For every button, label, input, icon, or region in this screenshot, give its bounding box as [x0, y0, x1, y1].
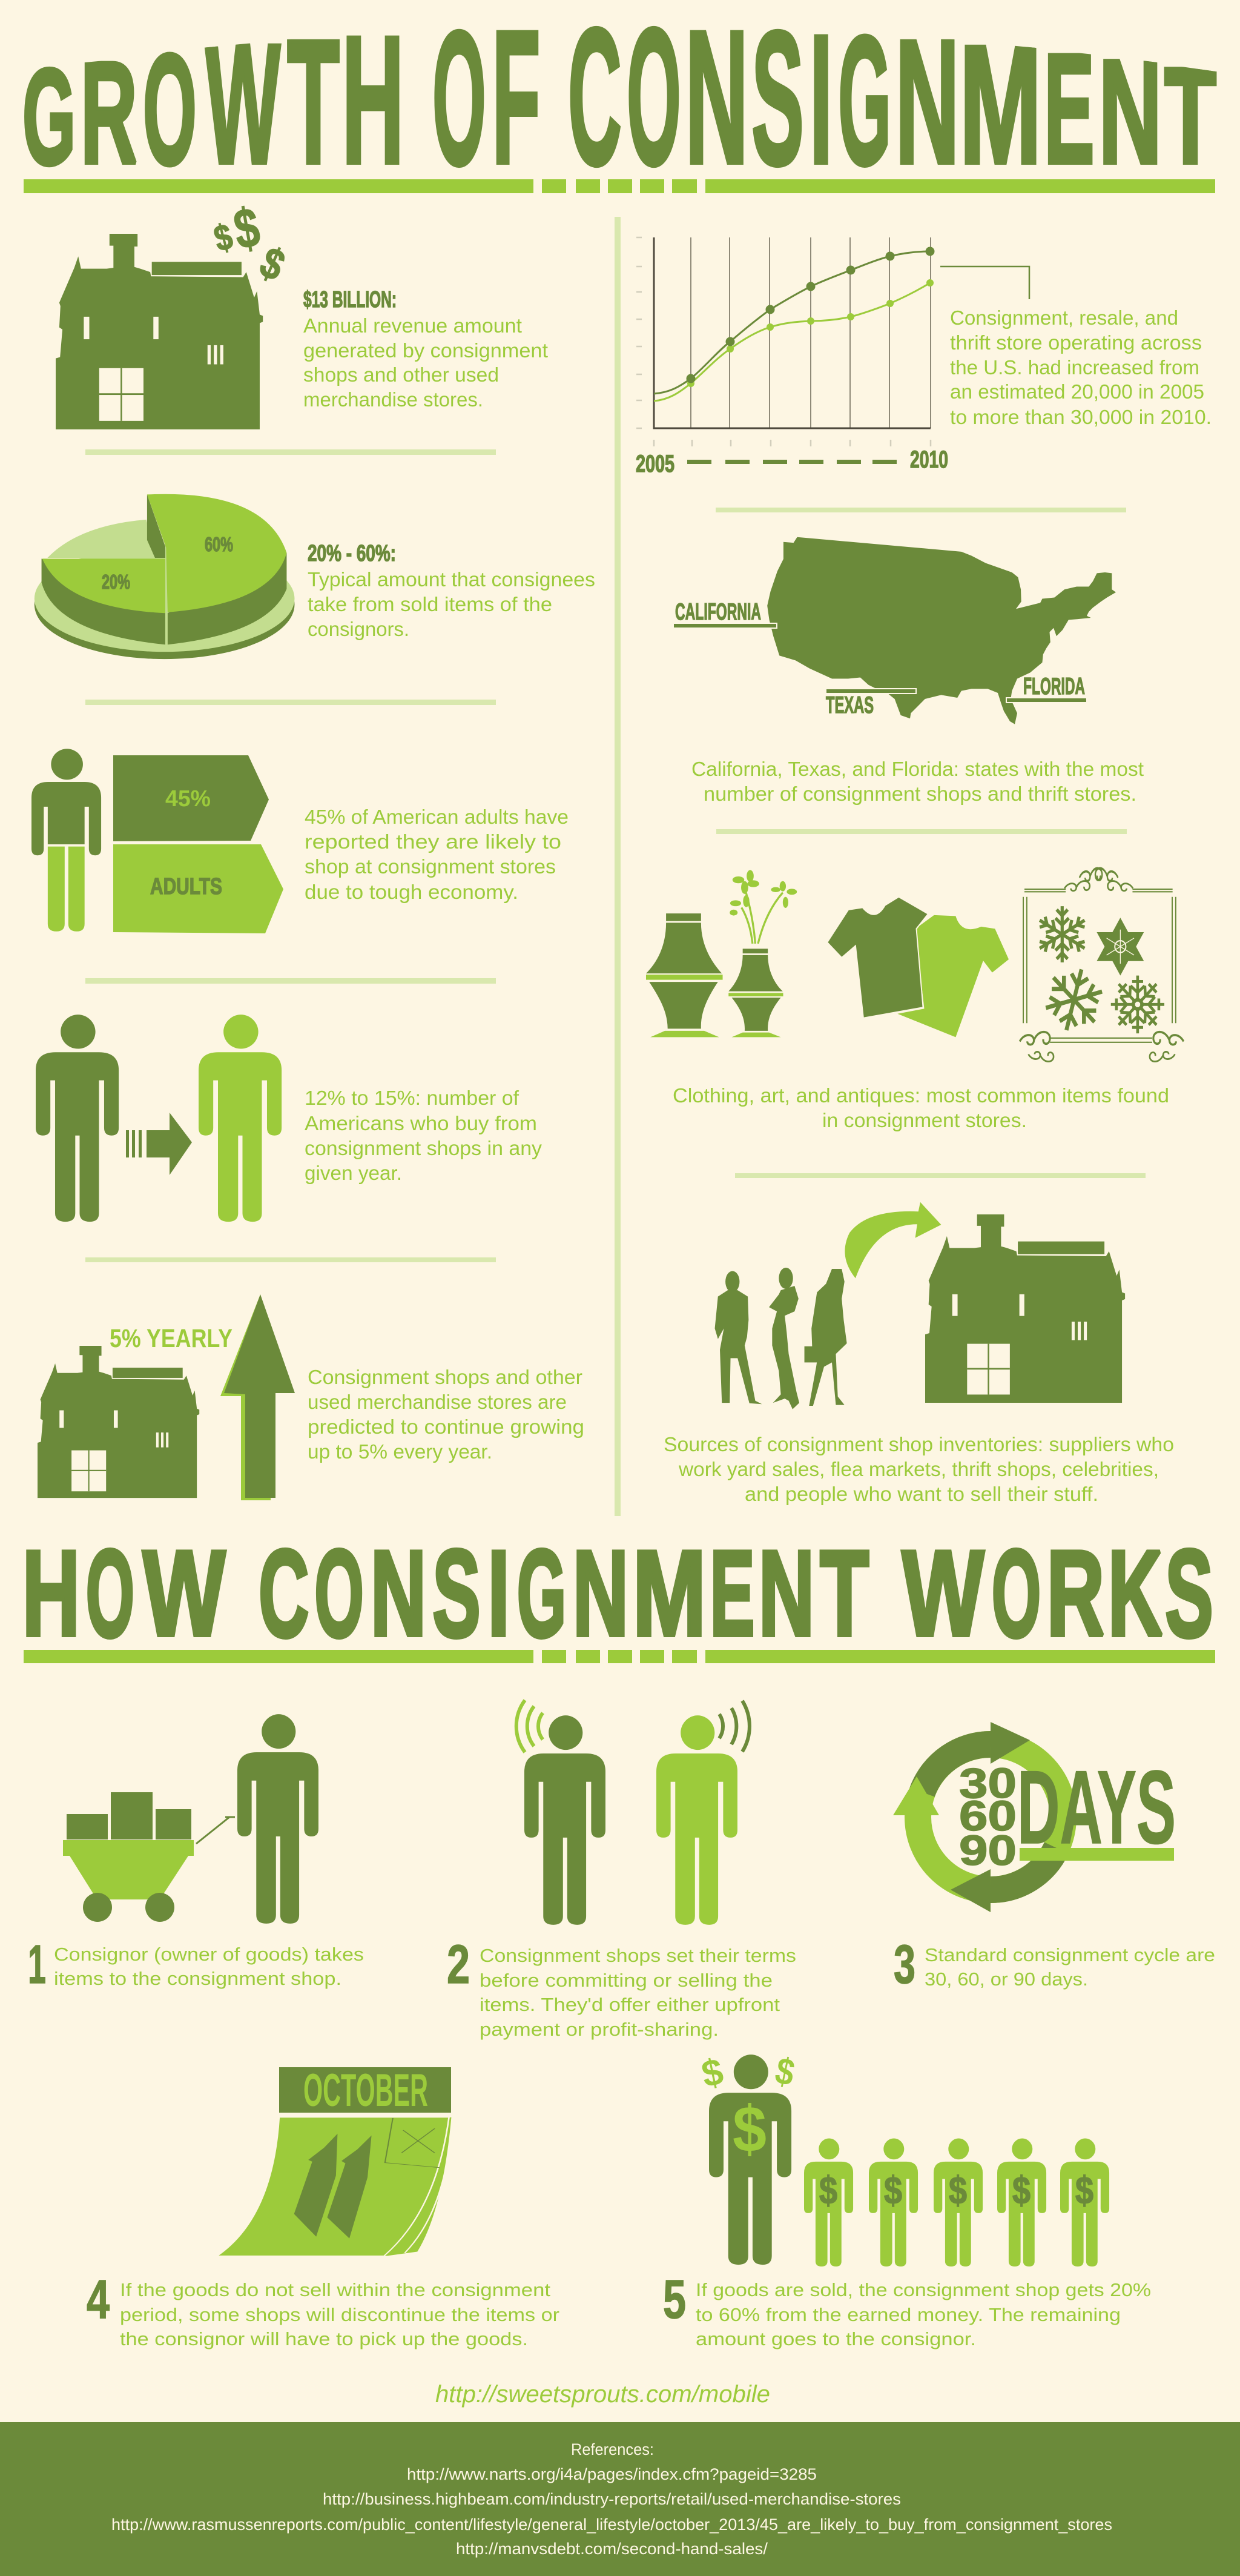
title: growth of consignment: G: [838, 0, 891, 203]
text: step 3: [925, 1944, 1215, 1990]
number 4: 4: [87, 2270, 110, 2330]
label: florida: FLORIDA: [1023, 674, 1085, 700]
text: step 4: period, some shops will discontinue the items or: [120, 2304, 559, 2325]
icon: shop with dollar signs: [56, 196, 292, 429]
line chart: [636, 237, 935, 446]
title: how consignment works: R: [1047, 1526, 1104, 1661]
text: step 5: to 60% from the earned money. The remaining: [696, 2304, 1121, 2325]
text: growth prediction: up to 5% every year.: [308, 1440, 492, 1463]
title: how consignment works: N: [371, 1526, 426, 1661]
icon: small vase with flowers: [728, 870, 797, 1037]
title: growth of consignment: I: [810, 0, 833, 202]
number 2: 2: [447, 1935, 470, 1995]
number 5: 5: [663, 2270, 686, 2330]
panel: store count chart: [636, 237, 1212, 477]
panel: 12 to 15 percent: [36, 1015, 542, 1222]
title: growth of consignment: [24, 25, 1217, 168]
title: growth of consignment: R: [81, 32, 137, 194]
text: store count: the U.S. had increased from: [950, 356, 1199, 379]
icon: dark person: [36, 1015, 119, 1222]
text: inventory sources: work yard sales, flea markets, thrift shops, celebrities,: [678, 1458, 1159, 1480]
panel: 20 to 60 percent: [35, 494, 595, 659]
icon: half filled person: [31, 749, 101, 932]
icon: shop owner with dollar signs: [698, 2050, 798, 2265]
text: store count: thrift store operating across: [950, 331, 1202, 354]
title: growth of consignment: O: [143, 22, 197, 197]
text: americans buying: 12% to 15%: number of: [305, 1087, 519, 1109]
panel: step 2: [447, 1700, 796, 2040]
text: step 1: items to the consignment shop.: [54, 1968, 341, 1989]
title: how consignment works: W: [143, 1526, 226, 1661]
text: 45 percent adults: shop at consignment stores: [305, 855, 556, 878]
connector line: [940, 267, 1029, 299]
text: annual revenue: Annual revenue amount: [303, 314, 522, 337]
icon: two people talking: [516, 1700, 750, 1925]
axis labels 2005 to 2010: 2010: [910, 446, 948, 473]
icon: calendar: [217, 2065, 451, 2256]
text: step 4: the consignor will have to pick up the goods.: [120, 2328, 528, 2349]
icon: five consignors with dollar signs: [804, 2138, 1109, 2266]
title: growth of consignment: G: [22, 41, 76, 193]
title: how consignment works: W: [902, 1526, 984, 1661]
title: how consignment works: C: [259, 1524, 309, 1663]
footer: references: http://manvsdebt.com/second-hand-sales/: [456, 2540, 768, 2558]
text: 45 percent adults: 45% of American adults have: [305, 806, 569, 828]
icon: five consignors with dollar signs: $: [819, 2168, 837, 2212]
title: how consignment works: G: [517, 1524, 566, 1663]
text: americans buying: given year.: [305, 1162, 402, 1184]
text: annual revenue: shops and other used: [303, 363, 499, 386]
icon: shop with dollar signs: $: [229, 196, 264, 261]
icon: framed snowflake art: [1020, 868, 1184, 1062]
title: how consignment works: O: [314, 1524, 364, 1663]
title: how consignment works: N: [573, 1526, 628, 1661]
text: inventory sources: Sources of consignment shop inventories: suppliers who: [664, 1433, 1174, 1455]
text: consignee share: Typical amount that consignees: [308, 568, 595, 591]
icon: up arrow: [220, 1294, 295, 1500]
text: top states: number of consignment shops and thrift stores.: [704, 783, 1136, 805]
text: common items: Clothing, art, and antiques: most common items found: [673, 1084, 1169, 1107]
panel: step 1: [28, 1714, 364, 1995]
label: texas: TEXAS: [826, 692, 874, 718]
heading: 20 to 60 percent: 20% - 60%:: [308, 541, 396, 566]
label: 5 percent yearly: 5% YEARLY: [110, 1324, 232, 1353]
panel: inventory sources: [664, 1202, 1174, 1505]
text: growth prediction: [308, 1366, 584, 1463]
icon: cycle arrows with 30 60 90 days: 30: [959, 1760, 1017, 1807]
text: store count: an estimated 20,000 in 2005: [950, 380, 1204, 403]
text: step 4: [120, 2279, 559, 2349]
icon: consignor person: [237, 1714, 318, 1924]
text: step 1: [54, 1944, 364, 1989]
footer: references: http://www.rasmussenreports.com/public_content/lifestyle/general_lifestyle/october_2013/45_are_likely_to_buy_from_consignment_stores: [111, 2515, 1112, 2534]
panel: 13 billion revenue: [56, 196, 548, 429]
text: top states: California, Texas, and Florida: states with the most: [691, 758, 1144, 780]
text: step 5: If goods are sold, the consignment shop gets 20%: [696, 2279, 1151, 2300]
panel: common items: [646, 868, 1184, 1131]
icon: shop: [925, 1214, 1125, 1403]
text: step 1: Consignor (owner of goods) takes: [54, 1944, 364, 1965]
pie chart: 60%: [205, 533, 233, 555]
number 1: 1: [28, 1935, 46, 1995]
title: how consignment works: T: [820, 1526, 869, 1661]
title: growth of consignment: T: [287, 3, 340, 200]
text: common items: in consignment stores.: [822, 1109, 1027, 1131]
text: step 5: [696, 2279, 1151, 2349]
title: how consignment works: [22, 1524, 1213, 1663]
icon: shop owner with dollar signs: $: [771, 2050, 798, 2094]
icon: cycle arrows with 30 60 90 days: 90: [959, 1827, 1017, 1874]
heading: 13 billion: $13 BILLION:: [303, 287, 397, 313]
title: growth of consignment: M: [960, 10, 1041, 199]
text: store count: Consignment, resale, and: [950, 306, 1178, 329]
pie chart: [35, 494, 294, 659]
panel: step 4: [87, 2065, 559, 2349]
text: step 2: payment or profit-sharing.: [480, 2019, 719, 2040]
text: annual revenue: generated by consignment: [303, 339, 548, 362]
footer: references: http://www.narts.org/i4a/pages/index.cfm?pageid=3285: [407, 2465, 817, 2483]
text: step 2: items. They'd offer either upfront: [480, 1994, 780, 2015]
section rule: [24, 1650, 1215, 1663]
label: california: [673, 599, 777, 628]
title: how consignment works: E: [710, 1526, 754, 1661]
text: consignee share: [308, 568, 595, 640]
panel: us states: [673, 537, 1144, 805]
icon: shop owner with dollar signs: $: [698, 2051, 727, 2096]
icon: calendar: OCTOBER: [303, 2065, 428, 2116]
text: store count: [950, 306, 1212, 428]
label: florida: [1006, 674, 1087, 703]
text: store count: to more than 30,000 in 2010.: [950, 406, 1212, 428]
text: step 3: 30, 60, or 90 days.: [925, 1968, 1088, 1990]
title: how consignment works: I: [487, 1526, 510, 1661]
text: inventory sources: and people who want to sell their stuff.: [745, 1483, 1098, 1505]
text: consignee share: consignors.: [308, 618, 409, 640]
panel: 45 percent adults: [31, 749, 569, 933]
text: americans buying: consignment shops in any: [305, 1137, 542, 1159]
icon: shop with dollar signs: $: [253, 238, 292, 291]
text: inventory sources: [664, 1433, 1174, 1505]
text: step 5: amount goes to the consignor.: [696, 2328, 976, 2349]
icon: five consignors with dollar signs: $: [1075, 2168, 1093, 2212]
title: how consignment works: O: [992, 1524, 1041, 1663]
arrow: curved to shop: [845, 1202, 941, 1278]
icon: arrow between people: [126, 1113, 192, 1175]
title: how consignment works: S: [432, 1524, 481, 1663]
text: annual revenue: merchandise stores.: [303, 388, 483, 411]
footer: references: [0, 2422, 1240, 2576]
text: 45 percent adults: due to tough economy.: [305, 881, 518, 903]
number 3: 3: [894, 1935, 915, 1995]
footer: references: http://business.highbeam.com/industry-reports/retail/used-merchandise-stores: [323, 2490, 901, 2508]
title: growth of consignment: H: [342, 0, 404, 201]
text: step 2: Consignment shops set their terms: [480, 1945, 796, 1966]
text: common items: [673, 1084, 1169, 1131]
icon: three women: [715, 1268, 847, 1409]
label: california: CALIFORNIA: [675, 599, 761, 625]
text: americans buying: Americans who buy from: [305, 1112, 537, 1134]
icon: light person: [199, 1015, 282, 1222]
title: growth of consignment: W: [205, 9, 281, 199]
axis labels 2005 to 2010: 2005: [636, 451, 674, 477]
text: 45 percent adults: [305, 806, 569, 903]
panel: step 5: [663, 2050, 1151, 2349]
title: how consignment works: N: [759, 1526, 814, 1661]
panel: step 3: [893, 1722, 1215, 1995]
panel: 5 percent yearly: [38, 1294, 584, 1500]
text: consignee share: take from sold items of the: [308, 593, 552, 615]
icon: large vase: [646, 913, 723, 1037]
icon: five consignors with dollar signs: $: [884, 2168, 902, 2212]
icon: cycle arrows with 30 60 90 days: 60: [959, 1792, 1017, 1839]
arrow label: 45 percent: [113, 755, 269, 841]
source url: http://sweetsprouts.com/mobile: [435, 2381, 770, 2408]
text: americans buying: [305, 1087, 542, 1184]
icon: shop with dollar signs: $: [210, 216, 237, 259]
icon: five consignors with dollar signs: $: [1012, 2168, 1031, 2212]
pie chart: 20%: [102, 571, 130, 593]
arrow label: adults: ADULTS: [150, 874, 222, 899]
text: growth prediction: Consignment shops and other: [308, 1366, 582, 1388]
arrow label: 45 percent: 45%: [165, 786, 211, 812]
title: growth of consignment: N: [895, 3, 960, 200]
text: step 4: If the goods do not sell within the consignment: [120, 2279, 550, 2300]
text: annual revenue: [303, 314, 548, 411]
icon: t-shirts: [827, 897, 1009, 1037]
central column divider: [615, 217, 621, 1516]
text: growth prediction: predicted to continue growing: [308, 1415, 584, 1438]
text: 45 percent adults: reported they are likely to: [305, 830, 561, 853]
title: how consignment works: M: [633, 1526, 706, 1661]
icon: shop: [38, 1346, 199, 1498]
title: how consignment works: O: [86, 1524, 134, 1663]
footer: references: References:: [571, 2440, 654, 2458]
text: step 2: before committing or selling the: [480, 1970, 773, 1991]
icon: shop owner with dollar signs: $: [733, 2092, 767, 2165]
axis labels 2005 to 2010: [636, 446, 948, 477]
icon: five consignors with dollar signs: $: [949, 2168, 967, 2212]
text: top states: [691, 758, 1144, 805]
icon: cycle arrows with 30 60 90 days: [893, 1722, 1176, 1912]
text: growth prediction: used merchandise stores are: [308, 1391, 567, 1413]
text: step 2: [480, 1945, 796, 2040]
title rule: [24, 179, 1215, 193]
arrow label: adults: [113, 844, 283, 933]
title: how consignment works: H: [22, 1526, 80, 1661]
text: step 3: Standard consignment cycle are: [925, 1944, 1215, 1965]
icon: cart with boxes: [63, 1792, 235, 1922]
map: united states: [767, 537, 1116, 724]
